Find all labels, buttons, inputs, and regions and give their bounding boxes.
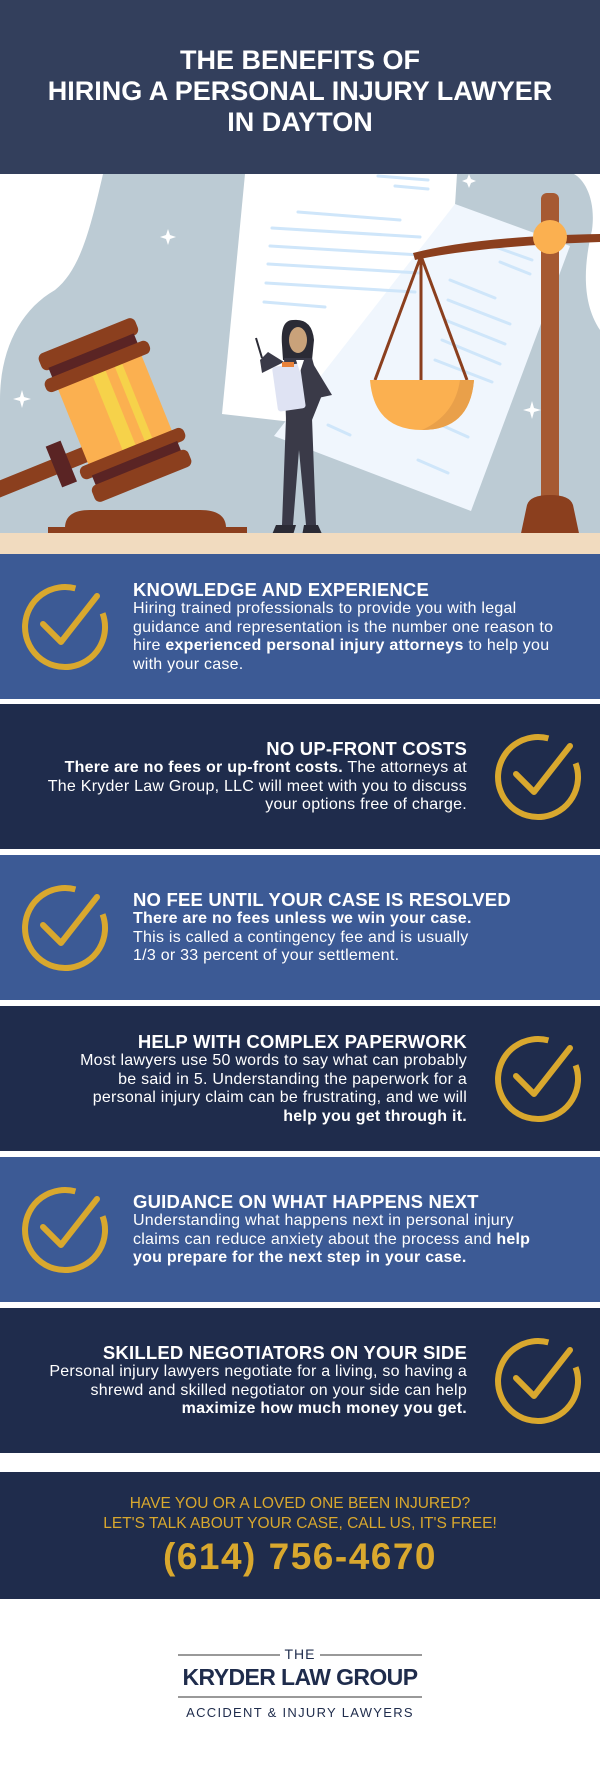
text: knowledge bbox=[133, 579, 553, 672]
text: knowledge: guidance and representation is the number one reason to bbox=[133, 618, 553, 636]
icon: check circle bbox=[495, 1036, 582, 1122]
text: no up-front: There are no fees or up-front costs. The attorneys at bbox=[65, 759, 467, 776]
header: title: HIRING A PERSONAL INJURY LAWYER bbox=[48, 76, 552, 106]
header: title bbox=[0, 0, 600, 174]
text: guidance: Understanding what happens next in personal injury bbox=[133, 1212, 514, 1229]
icon: check circle bbox=[495, 1338, 582, 1424]
logo: KRYDER LAW GROUP bbox=[183, 1664, 417, 1690]
text: knowledge: KNOWLEDGE AND EXPERIENCE bbox=[133, 579, 429, 600]
panel: knowledge and experience bbox=[0, 554, 600, 699]
icon: check circle bbox=[22, 1187, 108, 1273]
icon: check circle bbox=[495, 734, 582, 820]
text: paperwork: personal injury claim can be frustrating, and we will bbox=[93, 1089, 467, 1106]
text: paperwork: HELP WITH COMPLEX PAPERWORK bbox=[138, 1031, 467, 1052]
logo: ACCIDENT & INJURY LAWYERS bbox=[186, 1704, 414, 1720]
text: negotiators bbox=[49, 1342, 467, 1417]
icon: check circle bbox=[22, 584, 108, 670]
text: negotiators: shrewd and skilled negotiator on your side can help bbox=[90, 1382, 467, 1399]
icon: sparkles bbox=[13, 174, 541, 419]
ground bbox=[0, 533, 600, 554]
text: negotiators: maximize how much money you get. bbox=[182, 1400, 467, 1417]
text: phone number: (614) 756-4670 bbox=[163, 1536, 437, 1577]
illustration: lawyer with gavel and scales bbox=[0, 174, 600, 554]
logo: THE bbox=[284, 1646, 316, 1662]
text: knowledge: hire experienced personal injury attorneys to help you bbox=[133, 637, 549, 654]
icon: lawyer woman bbox=[256, 320, 332, 537]
text: guidance: you prepare for the next step in your case. bbox=[133, 1249, 467, 1266]
text: knowledge: with your case. bbox=[133, 656, 243, 672]
text: no up-front: your options free of charge. bbox=[265, 796, 467, 813]
text: cta question: LET'S TALK ABOUT YOUR CASE, CALL US, IT'S FREE! bbox=[103, 1514, 497, 1532]
panel: complex paperwork bbox=[0, 1006, 600, 1151]
text: no fee: This is called a contingency fee and is usually bbox=[133, 929, 468, 946]
text: negotiators: Personal injury lawyers negotiate for a living, so having a bbox=[49, 1363, 467, 1380]
panel: no fee until resolved bbox=[0, 855, 600, 1000]
text: cta question bbox=[103, 1495, 497, 1532]
text: no up-front: The Kryder Law Group, LLC will meet with you to discuss bbox=[48, 778, 467, 795]
panel: guidance bbox=[0, 1157, 600, 1302]
icon: check circle bbox=[22, 885, 108, 971]
text: guidance bbox=[133, 1191, 530, 1266]
text: guidance: claims can reduce anxiety about the process and help bbox=[133, 1231, 530, 1248]
text: paperwork bbox=[80, 1031, 467, 1124]
text: guidance: GUIDANCE ON WHAT HAPPENS NEXT bbox=[133, 1191, 479, 1212]
callout: call to action bbox=[0, 1472, 600, 1599]
text: negotiators: SKILLED NEGOTIATORS ON YOUR SIDE bbox=[103, 1342, 467, 1363]
text: no up-front: NO UP-FRONT COSTS bbox=[266, 738, 467, 759]
header: title: THE BENEFITS OF bbox=[180, 45, 420, 75]
text: cta question: HAVE YOU OR A LOVED ONE BEEN INJURED? bbox=[130, 1495, 470, 1512]
panel: skilled negotiators bbox=[0, 1308, 600, 1453]
text: no fee: 1/3 or 33 percent of your settlement. bbox=[133, 947, 399, 964]
text: no fee: There are no fees unless we win your case. bbox=[133, 910, 472, 927]
panel: no up-front costs bbox=[0, 704, 600, 849]
text: knowledge: Hiring trained professionals to provide you with legal bbox=[133, 600, 516, 617]
text: paperwork: help you get through it. bbox=[283, 1108, 467, 1124]
text: no fee bbox=[133, 889, 511, 964]
text: paperwork: Most lawyers use 50 words to say what can probably bbox=[80, 1052, 467, 1069]
header: title: IN DAYTON bbox=[227, 107, 373, 137]
icon: scales of justice bbox=[370, 193, 600, 538]
icon: documents bbox=[222, 174, 570, 511]
text: no fee: NO FEE UNTIL YOUR CASE IS RESOLVED bbox=[133, 889, 511, 910]
logo bbox=[178, 1646, 422, 1720]
text: no up-front bbox=[48, 738, 467, 813]
text: paperwork: be said in 5. Understanding the paperwork for a bbox=[118, 1070, 467, 1088]
icon: gavel bbox=[0, 315, 247, 541]
